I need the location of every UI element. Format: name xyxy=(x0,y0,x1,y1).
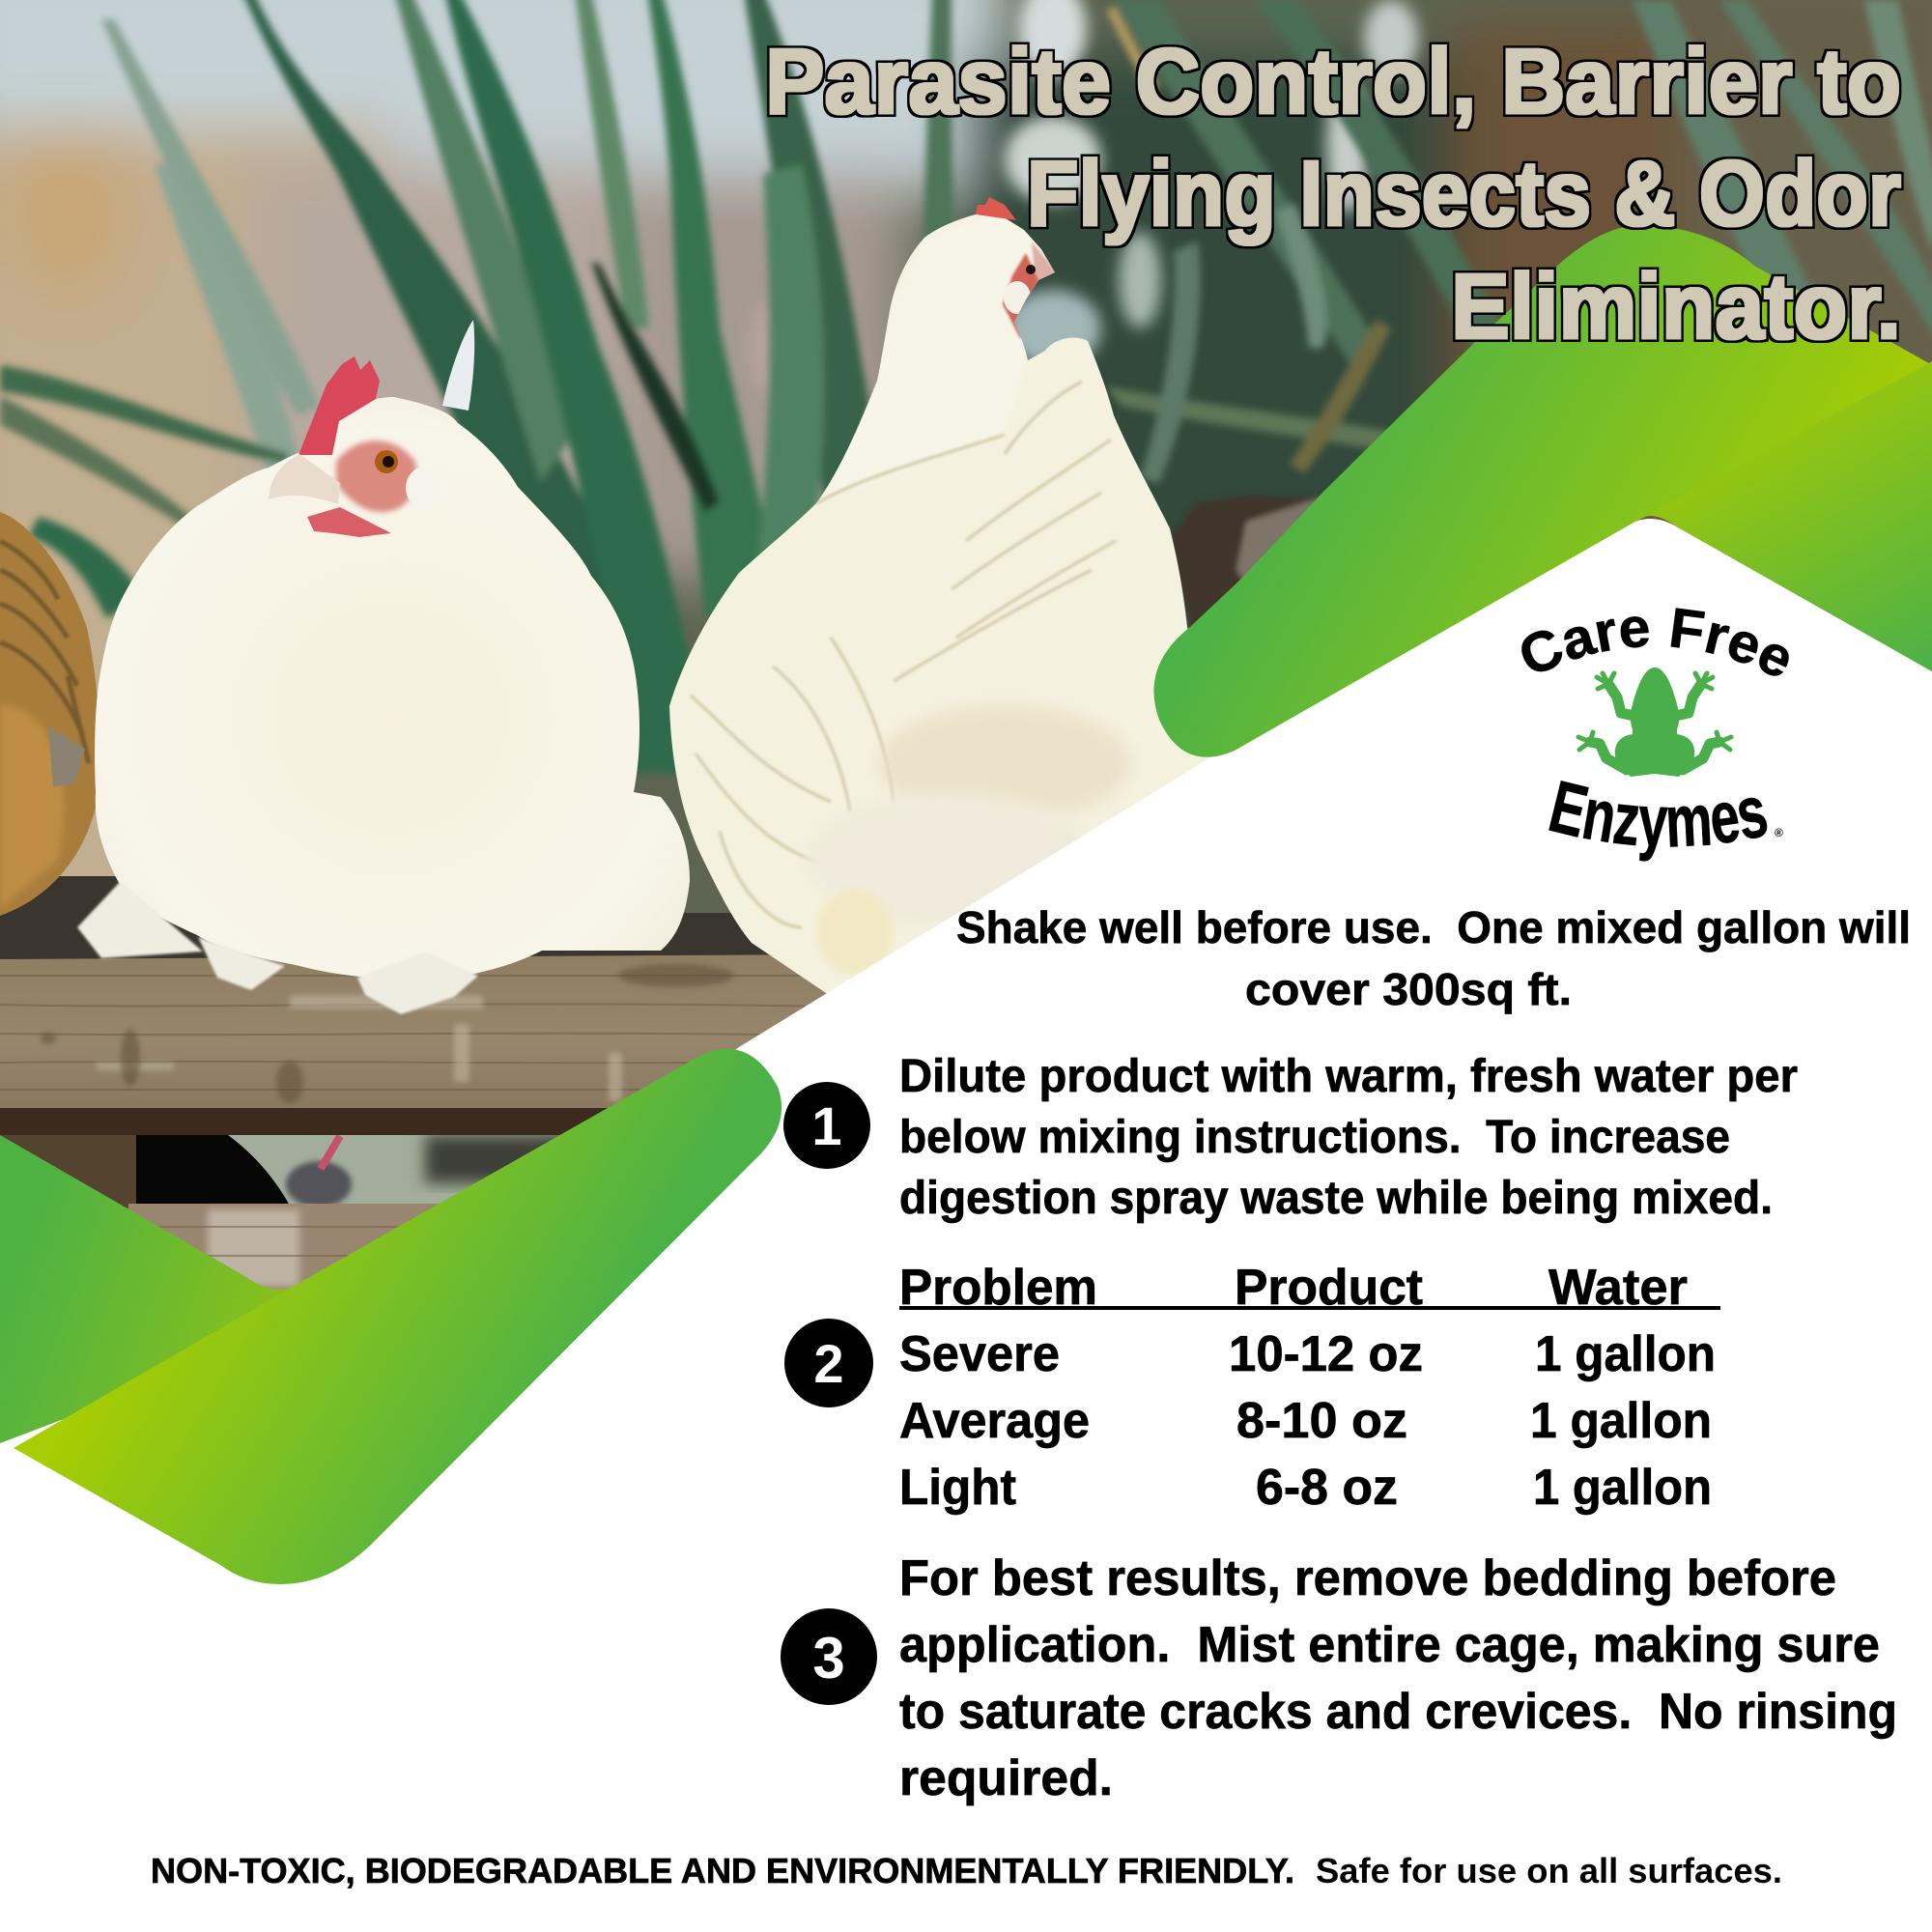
intro text xyxy=(956,902,1911,1014)
table header: Problem xyxy=(899,1260,1097,1316)
registered mark: ® xyxy=(1775,826,1783,839)
title: Eliminator. xyxy=(1451,255,1901,358)
dark foreground blades xyxy=(242,0,696,773)
table header: Product xyxy=(1235,1260,1423,1316)
face: red skin xyxy=(1003,253,1038,338)
green swoosh: lower left band xyxy=(14,1049,781,1584)
photo background: blurred garden xyxy=(0,0,1932,1294)
foot feathers xyxy=(816,889,894,976)
row: light: Light xyxy=(899,1460,1016,1516)
step 3 badge: 3 xyxy=(812,1626,845,1690)
step 1 text xyxy=(899,1051,1798,1224)
chicken: white hen on the right xyxy=(669,214,1211,993)
step 3 text: to saturate cracks and crevices. No rinsing xyxy=(899,1684,1897,1740)
row: average: Average xyxy=(899,1393,1090,1449)
face: eye xyxy=(1026,265,1036,274)
beak xyxy=(1031,242,1055,284)
table header: Water xyxy=(1548,1260,1688,1316)
eye xyxy=(375,450,398,473)
perch: top wooden plank xyxy=(0,954,850,1135)
beak xyxy=(269,454,340,504)
chicken: brown hen at left xyxy=(0,512,99,916)
logo text: Enzymes: Enzymes xyxy=(1548,781,1768,862)
footer statement: Safe for use on all surfaces. xyxy=(1316,1851,1782,1890)
dark bird behind the right hen xyxy=(1170,496,1321,638)
step 3 text xyxy=(899,1550,1897,1806)
intro text: Shake well before use. One mixed gallon will xyxy=(956,902,1911,952)
step 3 text: For best results, remove bedding before xyxy=(899,1550,1836,1606)
green swoosh: lower left wing xyxy=(0,1135,291,1443)
logo: Care Free Enzymes xyxy=(1521,608,1789,862)
belly down xyxy=(802,791,1049,871)
wattle xyxy=(307,507,391,537)
step 1 badge xyxy=(783,1082,870,1169)
footer statement: NON-TOXIC, BIODEGRADABLE AND ENVIRONMENTALLY FRIENDLY. xyxy=(151,1851,1294,1890)
photo: chickens on a wooden perch xyxy=(0,0,1932,1294)
comb of the right hen xyxy=(976,197,1016,220)
row: severe: 10-12 oz xyxy=(1229,1326,1423,1382)
mixing table xyxy=(899,1260,1720,1516)
white panel xyxy=(0,519,1932,1932)
row: average: 8-10 oz xyxy=(1236,1393,1407,1449)
neck and head xyxy=(816,211,1041,503)
green swoosh: right wing xyxy=(1644,361,1932,671)
step 3 text: application. Mist entire cage, making sure xyxy=(899,1617,1880,1673)
table header xyxy=(899,1260,1720,1316)
intro text: cover 300sq ft. xyxy=(1245,964,1572,1014)
left side blades xyxy=(0,365,290,464)
comb xyxy=(298,356,380,455)
logo text: Care Free: Care Free xyxy=(1521,608,1789,676)
ear patch xyxy=(406,467,444,509)
row: severe: 1 gallon xyxy=(1535,1326,1716,1382)
face xyxy=(336,440,416,512)
step 2 badge xyxy=(784,1319,873,1407)
tail tuft behind the left hen xyxy=(442,320,474,411)
face: white ear xyxy=(1004,281,1031,314)
row: light: 1 gallon xyxy=(1533,1460,1712,1516)
step 1 badge: 1 xyxy=(811,1095,842,1156)
perch: lower wooden plank xyxy=(128,1204,457,1291)
belly shading xyxy=(879,705,1130,821)
leg feathers xyxy=(77,881,478,1014)
step 1 text: digestion spray waste while being mixed. xyxy=(899,1173,1773,1224)
right side blades xyxy=(1111,0,1381,367)
step 2 badge: 2 xyxy=(813,1333,844,1394)
title: Parasite Control, Barrier to xyxy=(765,30,1901,133)
step 3 badge xyxy=(781,1608,877,1705)
light background blades xyxy=(101,19,319,415)
row: severe xyxy=(899,1326,1716,1382)
row: severe: Severe xyxy=(899,1326,1060,1382)
row: average: 1 gallon xyxy=(1530,1393,1712,1449)
wing feathers xyxy=(691,382,1116,927)
step 1 text: Dilute product with warm, fresh water per xyxy=(899,1051,1798,1102)
title xyxy=(765,30,1901,358)
green swoosh: upper right band xyxy=(1153,225,1932,757)
step 1 text: below mixing instructions. To increase xyxy=(899,1112,1730,1163)
row: light xyxy=(899,1460,1712,1516)
chicken: white hen on the left xyxy=(77,356,690,1014)
step 3 text: required. xyxy=(899,1750,1113,1806)
icon: green frog xyxy=(1578,668,1731,777)
footer statement xyxy=(151,1851,1782,1890)
row: average xyxy=(899,1393,1712,1449)
row: light: 6-8 oz xyxy=(1256,1460,1398,1516)
perch: gap under the top plank xyxy=(0,1130,773,1208)
perch: dark ledge behind the birds xyxy=(0,876,831,963)
